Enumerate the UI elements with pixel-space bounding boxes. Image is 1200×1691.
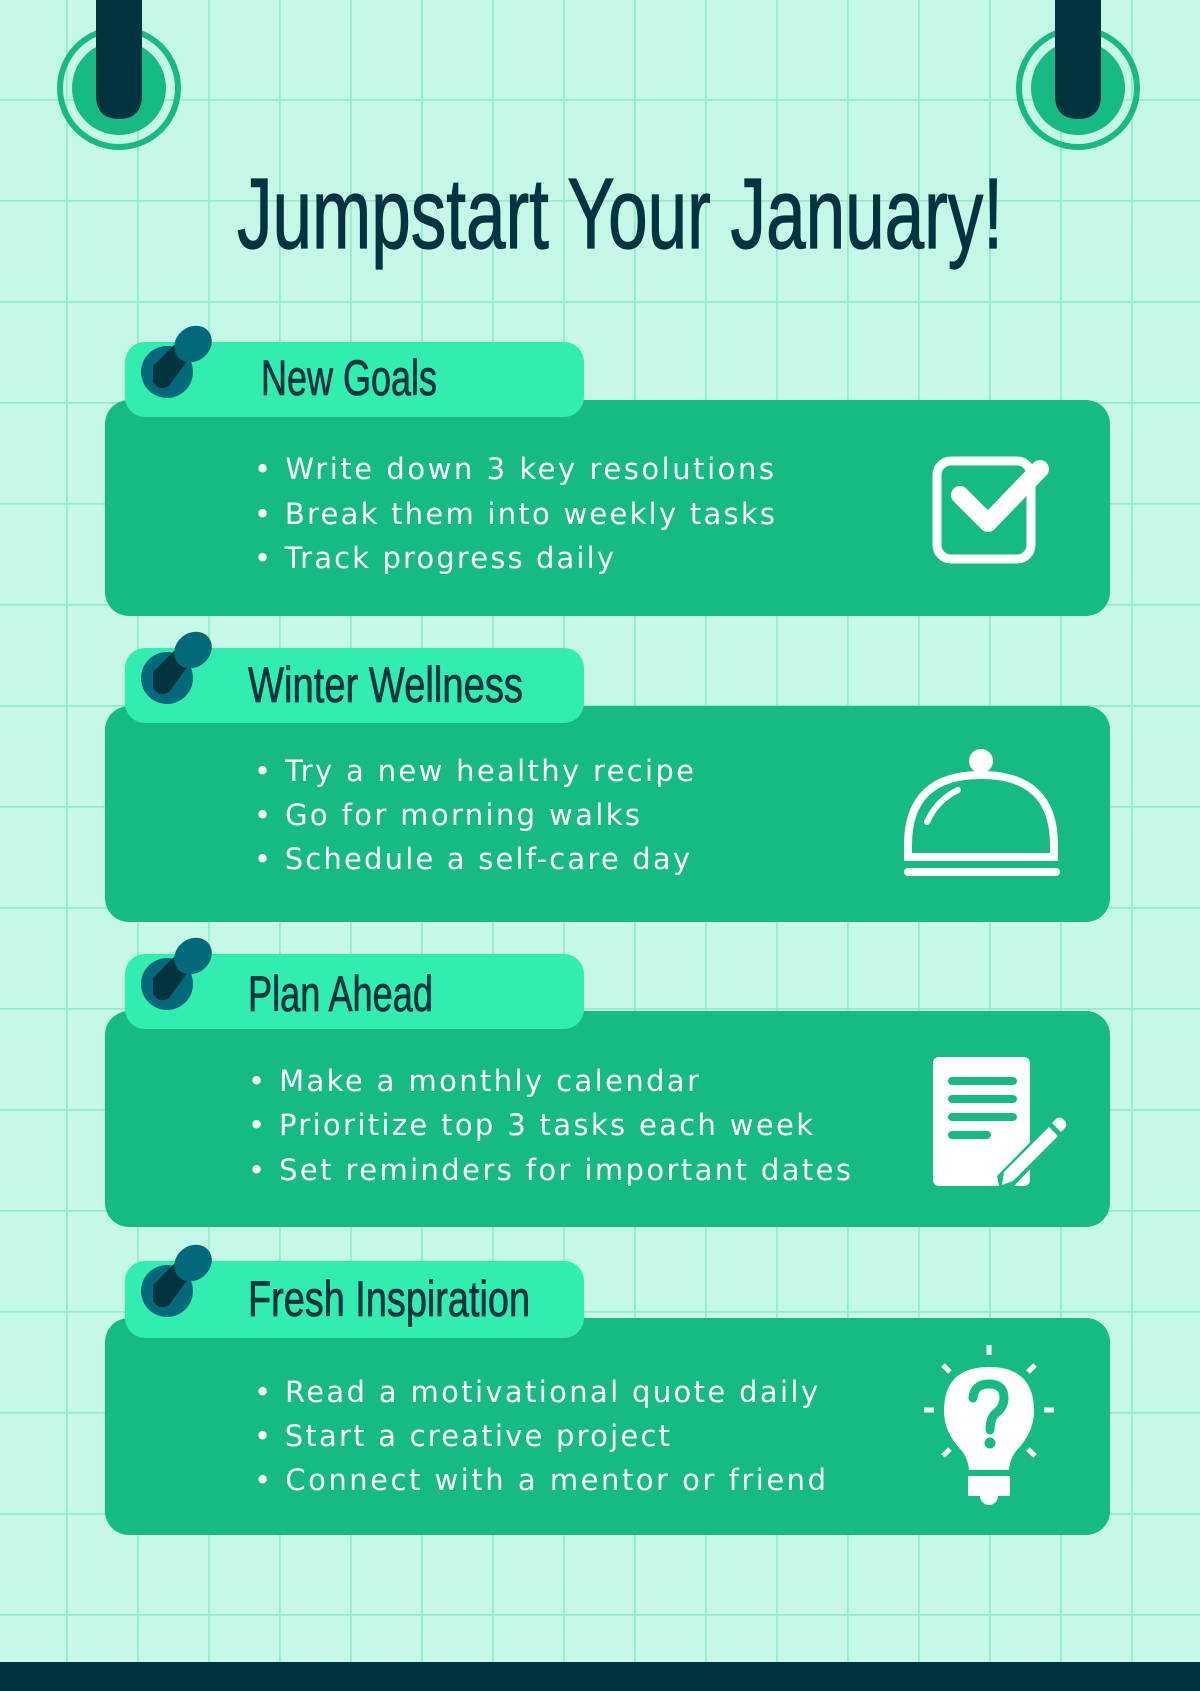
icon: checkbox xyxy=(937,461,1040,559)
tab: New Goals xyxy=(125,342,584,417)
icon: pushpin xyxy=(141,930,219,1010)
bullet list: Plan Ahead: • Make a monthly calendar xyxy=(248,1064,699,1098)
panel: Winter Wellness xyxy=(105,624,1110,922)
heading: Fresh Inspiration: Fresh Inspiration xyxy=(248,1271,530,1327)
icon: cloche xyxy=(908,749,1056,872)
bullet list: Winter Wellness xyxy=(254,754,694,876)
footer bar xyxy=(0,1662,1200,1691)
panel: Plan Ahead xyxy=(105,930,1110,1227)
bullet list: Plan Ahead xyxy=(248,1064,851,1187)
tab: Winter Wellness xyxy=(125,648,584,723)
bullet list: Winter Wellness: • Schedule a self-care day xyxy=(254,842,690,876)
bullet list: New Goals: • Write down 3 key resolutions xyxy=(254,452,774,486)
bullet list: Plan Ahead: • Prioritize top 3 tasks each week xyxy=(248,1108,813,1142)
heading: Winter Wellness: Winter Wellness xyxy=(248,657,523,713)
bullet list: Fresh Inspiration: • Connect with a mentor or friend xyxy=(254,1463,826,1497)
tab: Fresh Inspiration xyxy=(125,1261,584,1338)
heading: Plan Ahead: Plan Ahead xyxy=(248,966,433,1022)
binder ring: right xyxy=(1019,0,1137,147)
icon: lightbulb with question mark xyxy=(924,1345,1054,1505)
binder ring: left xyxy=(60,0,178,147)
bullet list: Winter Wellness: • Go for morning walks xyxy=(254,798,640,832)
icon: pushpin xyxy=(141,318,219,398)
bullet list: Plan Ahead: • Set reminders for important dates xyxy=(248,1153,851,1187)
icon: pushpin xyxy=(141,1237,219,1317)
bullet list: New Goals: • Track progress daily xyxy=(254,541,614,575)
bullet list: New Goals xyxy=(254,452,775,575)
heading: New Goals: New Goals xyxy=(261,350,437,406)
bullet list: Fresh Inspiration: • Start a creative project xyxy=(254,1419,670,1453)
panel: Fresh Inspiration xyxy=(105,1237,1110,1535)
tab: Plan Ahead xyxy=(125,954,584,1029)
bullet list: Fresh Inspiration xyxy=(254,1375,826,1497)
bullet list: Winter Wellness: • Try a new healthy recipe xyxy=(254,754,694,788)
panel: New Goals xyxy=(105,318,1110,616)
bullet list: New Goals: • Break them into weekly tasks xyxy=(254,497,775,531)
icon: document with pencil xyxy=(933,1057,1066,1186)
icon: pushpin xyxy=(141,624,219,704)
bullet list: Fresh Inspiration: • Read a motivational quote daily xyxy=(254,1375,818,1409)
